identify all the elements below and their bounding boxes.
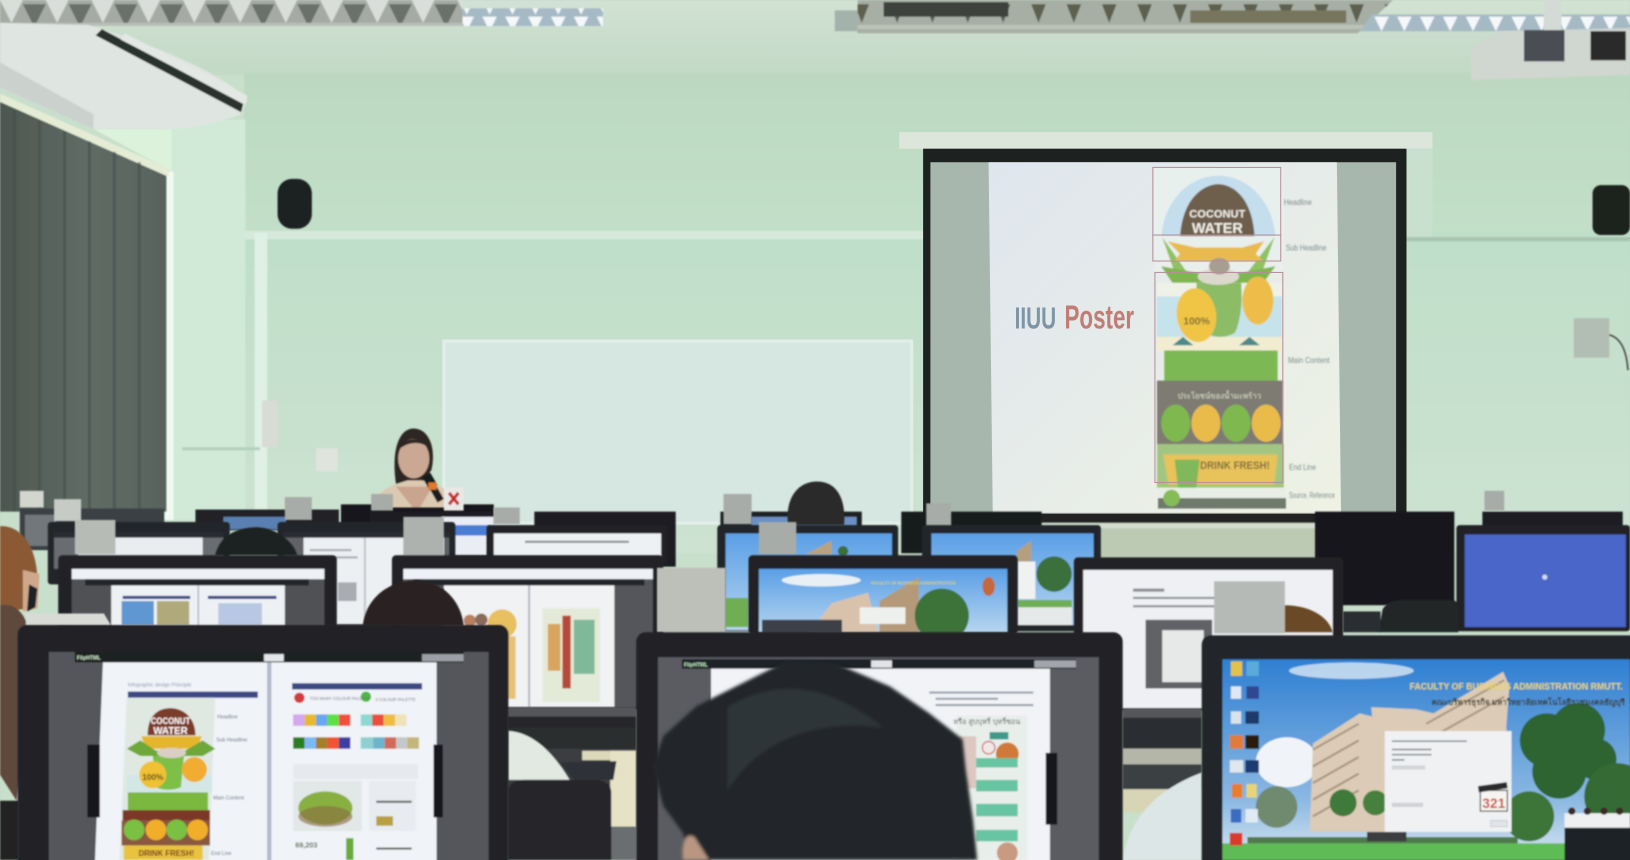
- paper signs on third row: [657, 568, 1285, 633]
- front center monitor: [636, 632, 1123, 860]
- students in wallpaper: [1565, 807, 1630, 860]
- monitor row 3, third wallpaper: FACULTY OF BUSINESS ADMINISTRATION: [871, 580, 956, 585]
- coconut water poster on slide: 100%: [1183, 316, 1210, 327]
- ceiling lights: [0, 0, 1630, 33]
- colour palettes: TOO MANY COLOUR PALETTE: [310, 696, 370, 701]
- colour palettes: 3 COLOUR PALETTE: [375, 697, 416, 702]
- poster annotations: End Line: [1289, 462, 1316, 472]
- poster frame guides: [1153, 167, 1283, 483]
- document body lines: [929, 692, 1033, 706]
- monitor row 3, third wallpaper: [748, 555, 1018, 643]
- coconut water poster on slide: WATER: [1192, 221, 1243, 237]
- infographic card: [953, 715, 1027, 860]
- installer dialog: [1385, 731, 1511, 832]
- viewer toolbar: [682, 659, 1076, 669]
- desks, keyboards and chair between front monitors: [507, 707, 1202, 860]
- monitor row 2, third: [487, 525, 667, 565]
- colour palettes: [293, 692, 419, 749]
- coconut poster: COCONUT: [151, 716, 191, 726]
- monitor row 2, fourth wallpaper: [717, 525, 898, 631]
- wall fixtures: switches and power box: [262, 318, 1628, 471]
- poster annotations: Main Content: [213, 796, 245, 802]
- slide title: IIUU: [1015, 303, 1056, 336]
- poster annotations: [211, 715, 247, 857]
- coconut poster: 100%: [142, 772, 164, 782]
- coconut poster: [120, 698, 215, 860]
- poster annotations: Headline: [217, 715, 238, 721]
- monitor row 3, fourth document: [1074, 557, 1343, 710]
- poster annotations: Source, Reference: [1289, 490, 1335, 500]
- coconut poster: WATER: [153, 726, 188, 737]
- screen housing: [899, 132, 1432, 149]
- air conditioner: [0, 23, 247, 129]
- monitor row 2, left: [48, 522, 230, 584]
- coconut water poster on slide: COCONUT: [1189, 208, 1246, 220]
- monitor row 2, right blue desktop: [1456, 525, 1630, 631]
- sign in wallpaper: [1367, 832, 1406, 841]
- coconut water poster on slide: ประโยชน์ของน้ำมะพร้าว: [1178, 389, 1261, 400]
- student head in front: [653, 661, 977, 860]
- installer dialog: 321: [1482, 796, 1506, 811]
- projector: [1471, 0, 1630, 80]
- poster annotations: Sub Headline: [1286, 243, 1327, 253]
- presenter with microphone: [372, 428, 464, 511]
- front right monitor with campus wallpaper: [1202, 635, 1630, 860]
- screen frame: [923, 149, 1406, 521]
- infographic card: หรือ สูบบุหรี่ บุหรี่ซอน: [953, 717, 1020, 726]
- projected slide: [989, 162, 1341, 514]
- slide title accent: Poster: [1064, 300, 1134, 337]
- document left page heading: Infographic design Principle: [128, 682, 192, 688]
- head in second row: [215, 527, 297, 555]
- viewer toolbar: [75, 652, 464, 662]
- monitor row 2, second: [278, 522, 455, 626]
- campus building: [1310, 672, 1513, 832]
- wallpaper subtitle: คณะบริหารธุรกิจ มหาวิทยาลัยเทคโนโลยีราชมงคลธัญบุรี: [1431, 697, 1625, 708]
- small stands of paper on desks: [20, 491, 1504, 555]
- front left monitor: FlipHTML: [77, 655, 101, 661]
- ledge under projection screen: [1040, 514, 1318, 528]
- lawn: [1222, 843, 1630, 860]
- clouds: [1289, 662, 1414, 679]
- coconut water poster on slide: [1154, 167, 1286, 509]
- open document page: [711, 669, 1050, 860]
- window curtain: [0, 94, 168, 512]
- coconut poster: DRINK FRESH!: [138, 849, 194, 858]
- open document pages: [95, 662, 437, 860]
- infographic example cards: 69,203: [295, 841, 317, 850]
- monitor row 2, fifth wallpaper: [922, 525, 1101, 631]
- desktop icons: [1230, 661, 1259, 845]
- office chair back: [1378, 600, 1458, 632]
- poster annotations: End Line: [211, 851, 232, 857]
- third row monitors: [58, 555, 1343, 710]
- poster annotations: [1284, 197, 1335, 500]
- poster annotations: Headline: [1284, 197, 1312, 207]
- infographic example cards: [293, 764, 418, 860]
- trees: [1520, 703, 1616, 799]
- clapperboard icon: [1480, 790, 1507, 811]
- side scroll handles: [87, 745, 100, 817]
- monitor row 3, second with poster: [392, 555, 663, 709]
- back row of monitors: [20, 504, 1623, 605]
- back row head: [788, 481, 844, 525]
- monitor row 3, left: [58, 555, 337, 628]
- front left monitor: [18, 625, 508, 860]
- projection screen: [899, 132, 1432, 521]
- students in middle rows: [0, 526, 1333, 860]
- whiteboard: [444, 341, 912, 523]
- second row monitors: [48, 522, 1630, 632]
- poster annotations: Main Content: [1288, 355, 1330, 365]
- colour section bar: [292, 683, 422, 689]
- front center monitor: FlipHTML: [684, 663, 708, 669]
- side scroll handle: [1046, 753, 1057, 825]
- poster annotations: Sub Headline: [216, 737, 247, 743]
- speakers: [278, 179, 1630, 235]
- coconut water poster on slide: DRINK FRESH!: [1200, 460, 1270, 472]
